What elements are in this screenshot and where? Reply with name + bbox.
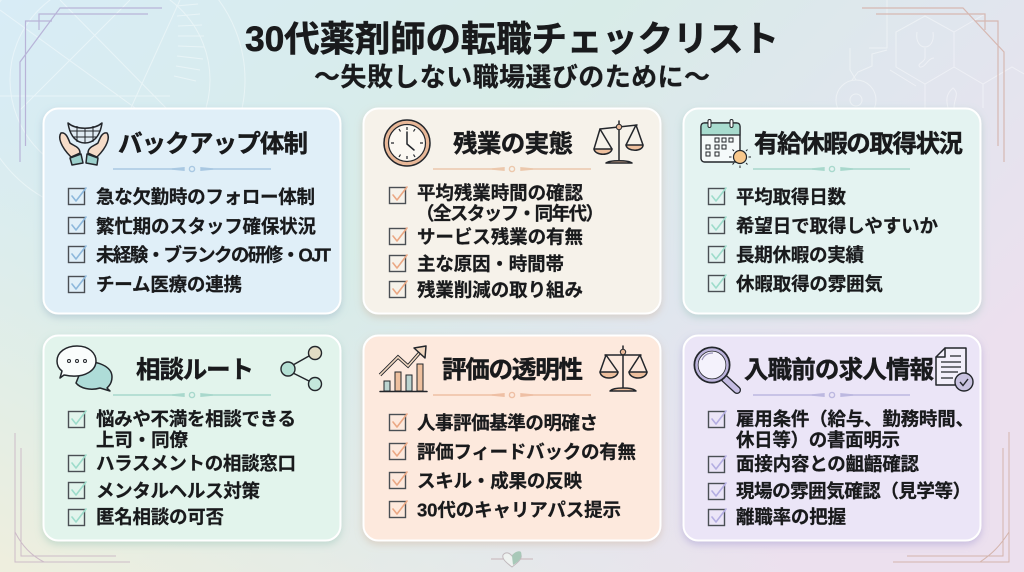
divider (113, 166, 271, 172)
checklist item: ハラスメントの相談窓口 (96, 453, 296, 474)
background pattern: right hexagons (836, 0, 1024, 120)
title: 30代薬剤師の転職チェックリスト (245, 19, 779, 59)
divider (113, 392, 271, 398)
checklist item: チーム医療の連携 (96, 274, 242, 295)
panel: backup system (44, 108, 340, 314)
checklist item: 人事評価基準の明確さ (417, 412, 598, 434)
icon: balance scale (600, 346, 647, 391)
checklist item: 30代のキャリアパス提示 (417, 500, 621, 520)
heading: 残業の実態 (453, 129, 573, 158)
divider (433, 166, 591, 172)
checklist item: 平均取得日数 (736, 186, 846, 208)
corner ornament: bottom left (15, 433, 130, 562)
divider (753, 392, 910, 398)
panel: evaluation transparency (364, 336, 660, 540)
corner ornament: top right (862, 8, 1004, 162)
icon: magnifying glass (696, 349, 737, 390)
checklist item (390, 182, 604, 224)
checklist item: 雇用条件（給与、勤務時間、 (736, 408, 974, 430)
panel: overtime (364, 108, 660, 314)
checklist item: 未経験・ブランクの研修・OJT (96, 244, 332, 266)
divider (433, 392, 591, 398)
checklist item: サービス残業の有無 (417, 226, 583, 248)
checklist item: 平均残業時間の確認 (417, 182, 583, 204)
icon: clock (384, 120, 430, 166)
checklist item: 休暇取得の雰囲気 (736, 274, 883, 294)
panel: pre-hire job info (684, 336, 980, 540)
panel: paid leave (684, 108, 980, 314)
checklist item: メンタルヘルス対策 (96, 480, 260, 502)
corner ornament: top left (20, 8, 162, 162)
checklist item: 悩みや不満を相談できる (96, 408, 296, 430)
checklist item: 繁忙期のスタッフ確保状況 (96, 216, 316, 237)
checklist item: 急な欠勤時のフォロー体制 (96, 186, 315, 208)
icon: rising chart (380, 346, 427, 392)
checklist item: 休日等）の書面明示 (736, 430, 900, 450)
checklist item: 主な原因・時間帯 (417, 254, 564, 274)
checklist item (708, 408, 974, 450)
icon: document with check (936, 348, 973, 391)
background pattern: left geometric circles (0, 0, 245, 215)
icon: balance scale (594, 121, 643, 163)
panel: consultation route (44, 336, 340, 540)
checklist item (68, 408, 296, 450)
divider (753, 166, 910, 172)
icon: hands holding net (60, 123, 108, 165)
heading: 相談ルート (136, 356, 254, 384)
checklist item: （全スタッフ・同年代） (416, 203, 604, 224)
checklist item: 面接内容との齟齬確認 (736, 454, 919, 474)
heading: バックアップ体制 (118, 130, 308, 158)
checklist item: 離職率の把握 (736, 506, 846, 528)
checklist item: 評価フィードバックの有無 (417, 442, 636, 462)
icon: share nodes (281, 346, 322, 390)
checklist item: 現場の雰囲気確認（見学等） (736, 480, 971, 502)
icon: calendar with sun (701, 120, 751, 168)
footer ornament: heart (491, 551, 533, 567)
checklist item: 残業削減の取り組み (417, 280, 583, 300)
subtitle: 〜失敗しない職場選びのために〜 (314, 62, 710, 92)
checklist item: 匿名相談の可否 (96, 506, 224, 528)
icon: chat bubbles (57, 346, 112, 391)
checklist item: スキル・成果の反映 (417, 470, 582, 492)
checklist item: 希望日で取得しやすいか (736, 216, 938, 236)
heading: 入職前の求人情報 (744, 356, 934, 384)
heading: 評価の透明性 (442, 356, 583, 384)
checklist item: 上司・同僚 (96, 430, 188, 450)
heading: 有給休暇の取得状況 (754, 130, 963, 158)
checklist item: 長期休暇の実績 (736, 244, 864, 266)
corner ornament: bottom right (893, 432, 1009, 562)
